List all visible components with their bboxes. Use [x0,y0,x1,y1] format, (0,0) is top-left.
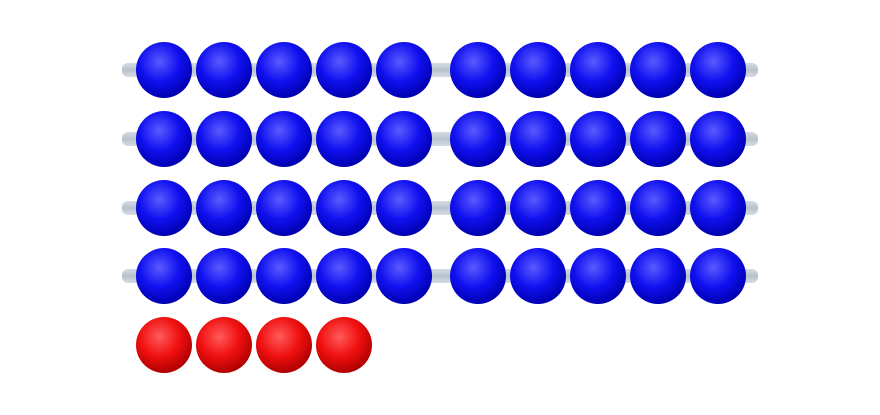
blue beads [136,42,746,304]
rods [122,63,758,283]
red beads [136,317,372,373]
